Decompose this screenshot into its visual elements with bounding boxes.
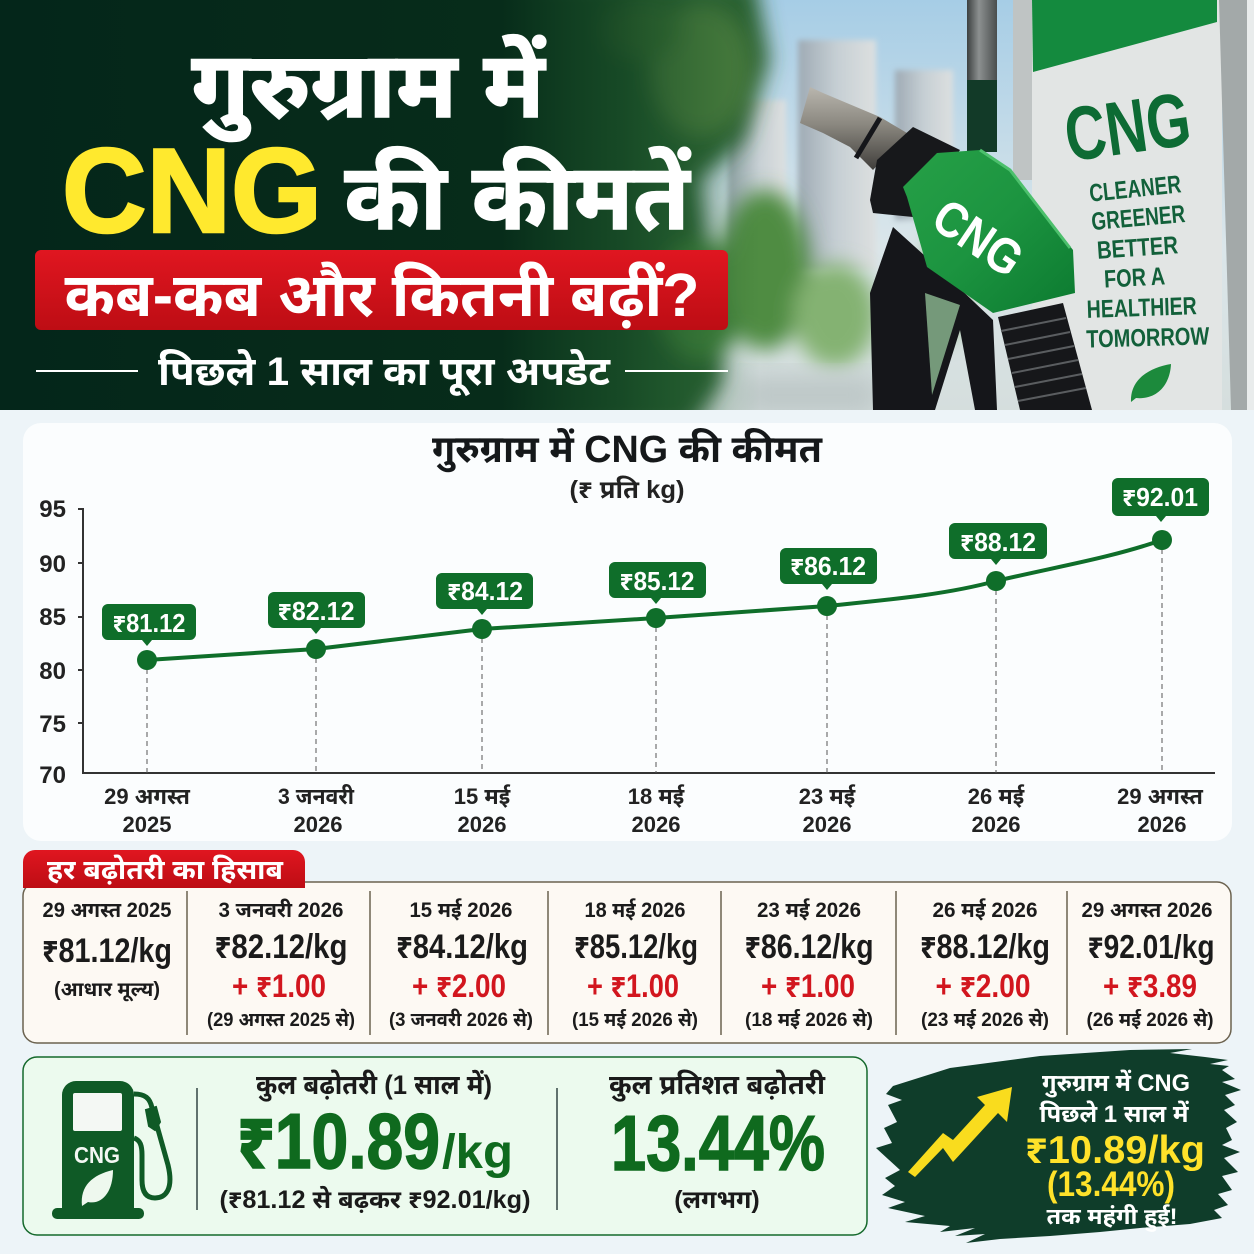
column: 18 मई 2026: ₹85.12/kg — [574, 928, 698, 966]
total percent increase — [609, 1070, 826, 1214]
header photo background — [0, 0, 1254, 430]
data points — [137, 530, 1172, 670]
x axis labels: 29 अगस्त — [104, 784, 190, 809]
column: 29 अगस्त 2025: (आधार मूल्य) — [54, 979, 160, 1002]
y axis: 85 — [39, 604, 66, 631]
column: 23 मई 2026 — [744, 898, 874, 1031]
column: 15 मई 2026: + ₹2.00 — [412, 968, 506, 1004]
column: 23 मई 2026: + ₹1.00 — [761, 968, 855, 1004]
column: 18 मई 2026: + ₹1.00 — [587, 968, 679, 1004]
column: 29 अगस्त 2025: 29 अगस्त 2025 — [42, 899, 172, 922]
total rupee increase — [220, 1069, 530, 1214]
axes — [78, 509, 1215, 773]
column: 23 मई 2026: ₹86.12/kg — [744, 928, 874, 966]
icon: CNG fuel pump — [52, 1081, 170, 1219]
total percent increase: (लगभग) — [674, 1186, 760, 1214]
CNG sign board: FOR A — [1103, 262, 1166, 294]
CNG sign board: BETTER — [1096, 231, 1179, 265]
panel: line chart: ₹81.12 — [112, 608, 186, 638]
column: 26 मई 2026: 26 मई 2026 — [932, 898, 1038, 922]
column: 29 अगस्त 2025: ₹81.12/kg — [42, 932, 172, 970]
column: 26 मई 2026: + ₹2.00 — [936, 968, 1030, 1004]
total percent increase: 13.44% — [611, 1099, 825, 1187]
callout: summary: ₹10.89/kg — [1025, 1129, 1205, 1172]
y axis — [39, 496, 66, 789]
CNG sign board: CNG — [1059, 77, 1196, 178]
panel: increment table — [23, 850, 1231, 1043]
tagline: पिछले 1 साल का पूरा अपडेट — [158, 349, 611, 396]
chart heading: गुरुग्राम में CNG की कीमत — [432, 427, 823, 473]
panel: line chart: ₹82.12 — [278, 596, 354, 626]
column: 3 जनवरी 2026: 3 जनवरी 2026 — [218, 898, 344, 922]
panel: total increase — [23, 1057, 867, 1235]
x axis labels: 18 मई — [628, 784, 685, 809]
chart unit: (₹ प्रति kg) — [570, 475, 684, 504]
column: 29 अगस्त 2026: 29 अगस्त 2026 — [1082, 899, 1212, 922]
x axis labels: 29 अगस्त — [1117, 784, 1203, 809]
column: 15 मई 2026: (3 जनवरी 2026 से) — [389, 1008, 533, 1031]
column: 18 मई 2026 — [572, 898, 698, 1031]
column: 3 जनवरी 2026: + ₹1.00 — [232, 968, 326, 1004]
y axis: 80 — [39, 658, 66, 685]
column: 3 जनवरी 2026: (29 अगस्त 2025 से) — [207, 1008, 355, 1031]
title: CNG — [62, 124, 322, 258]
x axis labels: 3 जनवरी — [278, 784, 355, 809]
column: 29 अगस्त 2026: + ₹3.89 — [1103, 968, 1197, 1004]
CNG sign board: GREENER — [1090, 200, 1186, 236]
column: 29 अगस्त 2026: (26 मई 2026 से) — [1086, 1008, 1214, 1031]
column: 18 मई 2026: 18 मई 2026 — [584, 898, 686, 922]
y axis: 75 — [39, 711, 66, 738]
callout: summary: तक महंगी हुई! — [1046, 1204, 1178, 1232]
x axis labels: 26 मई — [968, 784, 1025, 809]
x axis labels: 15 मई — [454, 784, 511, 809]
y axis: 70 — [39, 762, 66, 789]
icon: CNG fuel pump: CNG — [74, 1142, 120, 1168]
column: 29 अगस्त 2026 — [1082, 899, 1214, 1031]
panel: line chart: ₹85.12 — [620, 566, 694, 596]
x axis labels: 2026 — [803, 812, 851, 837]
total rupee increase: /kg — [442, 1126, 513, 1179]
column: 26 मई 2026: (23 मई 2026 से) — [921, 1008, 1049, 1031]
callout: summary: पिछले 1 साल में — [1040, 1100, 1189, 1128]
table tab heading: हर बढ़ोतरी का हिसाब — [47, 855, 284, 885]
column: 3 जनवरी 2026: ₹82.12/kg — [214, 928, 348, 966]
y axis: 90 — [39, 551, 66, 578]
panel: line chart — [23, 423, 1232, 841]
panel: line chart: ₹86.12 — [790, 551, 866, 581]
callout: summary — [876, 1049, 1241, 1243]
x axis labels: 2025 — [123, 812, 171, 837]
column: 29 अगस्त 2026: ₹92.01/kg — [1088, 928, 1214, 965]
column: 29 अगस्त 2025 — [42, 899, 172, 1002]
panel: line chart: ₹84.12 — [447, 576, 523, 606]
CNG sign board: CLEANER — [1088, 170, 1182, 208]
column: 18 मई 2026: (15 मई 2026 से) — [572, 1008, 698, 1031]
column: 15 मई 2026 — [389, 898, 533, 1031]
column: 15 मई 2026: ₹84.12/kg — [396, 928, 528, 966]
panel: line chart: ₹88.12 — [960, 527, 1036, 557]
total rupee increase: ₹10.89 — [237, 1097, 440, 1185]
column: 23 मई 2026: 23 मई 2026 — [757, 898, 861, 922]
x axis labels: 2026 — [458, 812, 506, 837]
total rupee increase: (₹81.12 से बढ़कर ₹92.01/kg) — [220, 1185, 530, 1214]
title: गुरुग्राम में — [192, 34, 547, 142]
callout: summary: गुरुग्राम में CNG — [1042, 1069, 1190, 1098]
fuel nozzle — [800, 87, 1092, 410]
column: 15 मई 2026: 15 मई 2026 — [410, 898, 512, 922]
y axis: 95 — [39, 496, 66, 523]
CNG sign board: HEALTHIER — [1086, 292, 1197, 324]
total rupee increase: कुल बढ़ोतरी (1 साल में) — [256, 1069, 492, 1101]
total percent increase: कुल प्रतिशत बढ़ोतरी — [609, 1070, 826, 1101]
x axis labels: 23 मई — [799, 784, 856, 809]
header banner — [0, 0, 1254, 430]
column: 26 मई 2026: ₹88.12/kg — [920, 928, 1050, 966]
x axis labels: 2026 — [1138, 812, 1186, 837]
callout: summary: (13.44%) — [1047, 1165, 1175, 1204]
icon: leaf — [1131, 364, 1171, 402]
title: की कीमतें — [344, 146, 691, 249]
title — [62, 34, 691, 258]
column: 23 मई 2026: (18 मई 2026 से) — [745, 1008, 873, 1031]
column: 26 मई 2026 — [920, 898, 1050, 1031]
x axis labels: 2026 — [294, 812, 342, 837]
fuel nozzle: CNG — [923, 188, 1033, 288]
price line — [147, 540, 1162, 660]
data labels — [102, 478, 1209, 646]
icon: rising arrow — [908, 1087, 1012, 1177]
x axis labels: 2026 — [632, 812, 680, 837]
drop lines — [147, 540, 1162, 773]
x axis labels — [104, 784, 1203, 837]
column: 3 जनवरी 2026 — [207, 898, 355, 1031]
x axis labels: 2026 — [972, 812, 1020, 837]
CNG sign board — [967, 0, 1254, 410]
subtitle ribbon: कब-कब और कितनी बढ़ीं? — [64, 261, 700, 329]
CNG sign board: TOMORROW — [1086, 322, 1210, 354]
table tab heading — [23, 850, 305, 888]
panel: line chart: ₹92.01 — [1122, 482, 1198, 512]
